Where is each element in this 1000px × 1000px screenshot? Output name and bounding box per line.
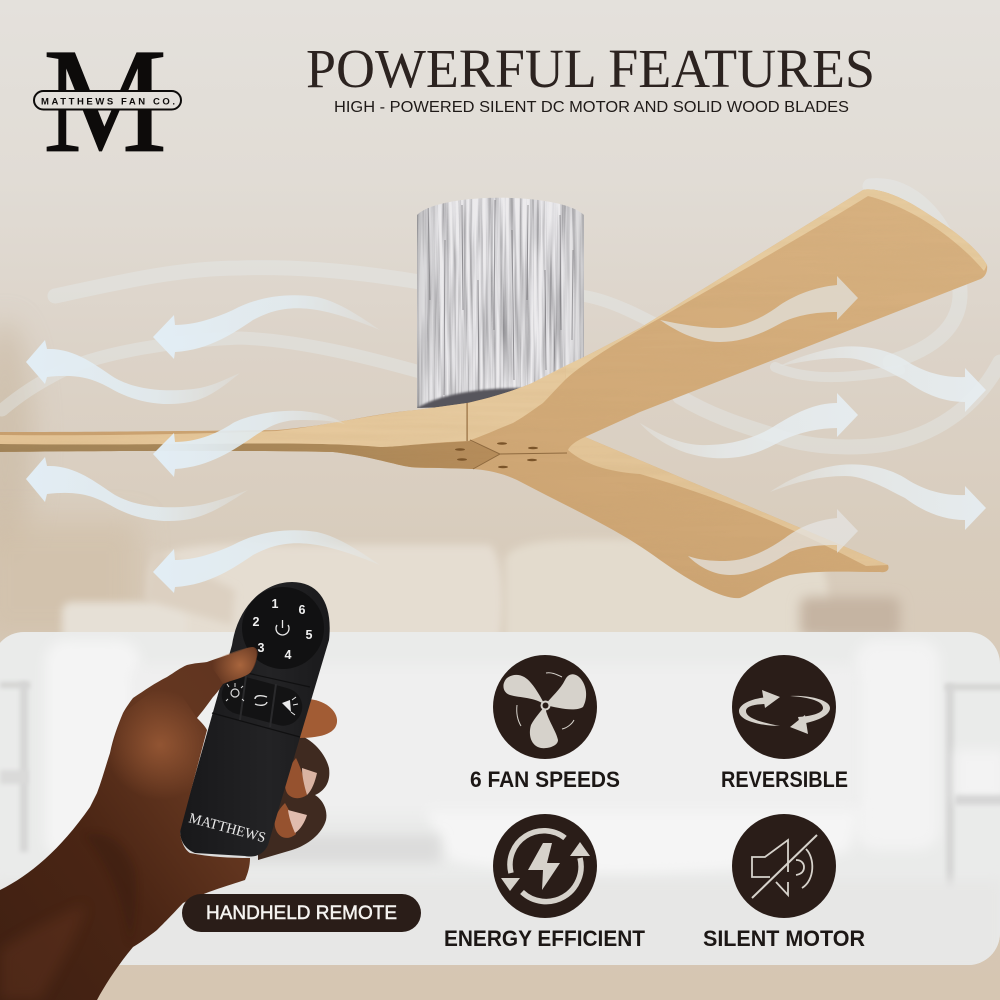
arrow: lower far left (26, 457, 248, 521)
remote brand text: MATTHEWS (187, 810, 267, 846)
feature: 6 fan speeds (470, 655, 620, 792)
hand and thumb (0, 647, 258, 1000)
label: ENERGY EFFICIENT (444, 926, 646, 951)
fan blades (0, 185, 1000, 605)
feature: reversible (721, 655, 848, 792)
logo: Matthews Fan Co: M (43, 18, 167, 184)
arrow: upper far right (780, 346, 986, 412)
remote dial: 1 (272, 597, 279, 611)
remote dial: 3 (258, 641, 265, 655)
label: 6 FAN SPEEDS (470, 767, 620, 792)
label pill: handheld remote: HANDHELD REMOTE (206, 903, 397, 924)
airflow: faint background streams (2, 186, 1000, 447)
background: blurred sofa and plant (0, 320, 900, 642)
feature: energy efficient (444, 814, 646, 951)
blade silhouette (0, 189, 987, 598)
arrow: lower blade (688, 509, 858, 575)
icon: bolt in cycle arrows (493, 814, 597, 918)
remote body (180, 582, 330, 857)
remote dial (242, 587, 324, 669)
blade: upper root highlight (468, 366, 566, 441)
airflow arrows (26, 276, 986, 593)
arrow: upper left (153, 295, 380, 359)
subtitle: HIGH - POWERED SILENT DC MOTOR AND SOLID WOOD BLADES (334, 99, 849, 116)
logo: Matthews Fan Co: MATTHEWS FAN CO. (41, 96, 175, 108)
remote dial: 5 (306, 628, 313, 642)
blade: left top face (0, 403, 467, 447)
remote buttons (212, 672, 310, 737)
fingers (258, 699, 337, 860)
hand holding remote (0, 582, 337, 1000)
icon: rotation arrows (732, 655, 836, 759)
label: REVERSIBLE (721, 767, 848, 792)
title: POWERFUL FEATURES (306, 38, 875, 99)
arrow: middle right (640, 393, 858, 458)
remote dial: 2 (253, 615, 260, 629)
remote dial: 6 (299, 603, 306, 617)
arrow: middle left (153, 411, 345, 477)
blade: lower root highlight (568, 437, 888, 566)
blade: left underside (0, 441, 500, 469)
label pill: handheld remote (182, 894, 421, 932)
blade: upper edge bevel (565, 189, 987, 379)
icon: fan (493, 655, 597, 759)
label: SILENT MOTOR (703, 926, 865, 951)
feature: silent motor (703, 814, 865, 951)
blade: grain and seams (455, 403, 567, 470)
arrow: upper far left (26, 340, 240, 404)
panel: frosted features panel (0, 632, 1000, 970)
arrow: lower left (153, 530, 380, 593)
icon: muted speaker (732, 814, 836, 918)
fan motor housing: whitewashed wood cylinder (417, 198, 584, 408)
remote dial: 4 (285, 648, 292, 662)
arrow: upper blade (660, 276, 858, 342)
arrow: lower far right (770, 464, 986, 530)
